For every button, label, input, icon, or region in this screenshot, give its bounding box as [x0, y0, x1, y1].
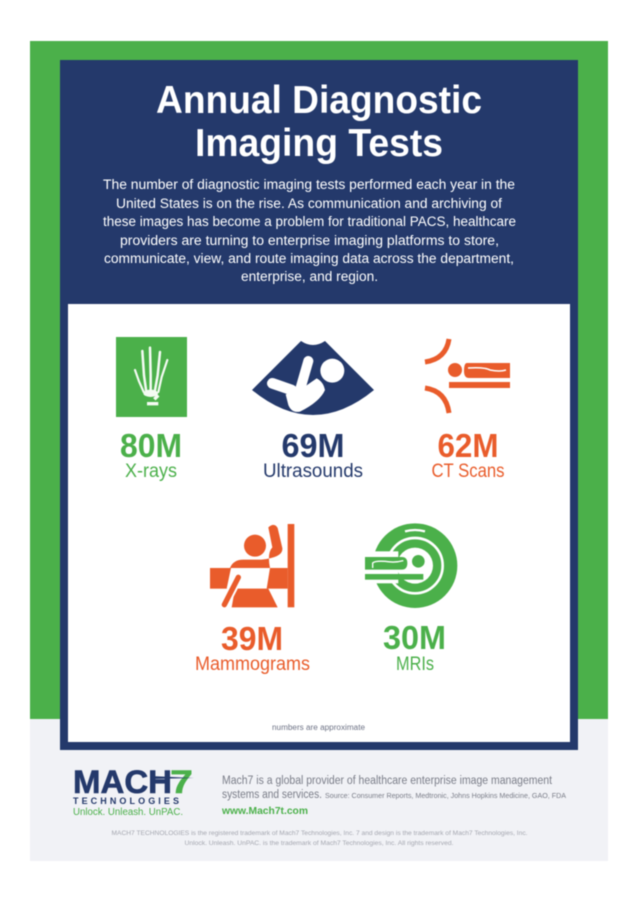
stat: x-rays	[120, 427, 182, 482]
icon: ultrasound	[252, 341, 374, 415]
background: green band	[30, 41, 608, 719]
company description: Source: Consumer Reports, Medtronic, Johns Hopkins Medicine, GAO, FDA	[325, 791, 566, 800]
stat: x-rays: X-rays	[125, 461, 177, 482]
navy frame	[60, 60, 578, 750]
stat: mammograms	[195, 620, 310, 675]
note: numbers are approximate: numbers are approximate	[272, 723, 366, 732]
stat: CT scans: CT Scans	[432, 461, 504, 482]
intro paragraph: providers are turning to enterprise imaging platforms to store,	[120, 233, 499, 248]
stat: mammograms: 39M	[221, 620, 283, 657]
icon: mammogram	[210, 524, 294, 607]
title	[156, 79, 482, 165]
company description	[222, 775, 566, 801]
icon: MRI	[360, 523, 457, 608]
intro paragraph: The number of diagnostic imaging tests performed each year in the	[103, 177, 515, 192]
intro paragraph: these images has become a problem for traditional PACS, healthcare	[103, 214, 516, 229]
icon: x-ray hand	[116, 337, 187, 417]
background: footer gray band	[30, 719, 608, 861]
title: Imaging Tests	[195, 122, 443, 165]
logo: Mach7 Technologies	[73, 764, 194, 818]
legal text	[112, 830, 528, 847]
stat: ultrasounds: Ultrasounds	[263, 461, 363, 482]
intro paragraph: communicate, view, and route imaging data across the department,	[104, 251, 514, 266]
legal text: MACH7 TECHNOLOGIES is the registered trademark of Mach7 Technologies, Inc. 7 and design is the trademark of Mach7 Technologies, Inc.	[112, 830, 528, 837]
company description: systems and services.	[222, 789, 322, 801]
white panel	[68, 304, 570, 742]
legal text: Unlock. Unleash. UnPAC. is the trademark of Mach7 Technologies, Inc. All rights reserved.	[184, 840, 454, 847]
logo: Mach7 Technologies: Unlock. Unleash. UnPAC.	[73, 807, 183, 818]
intro paragraph: United States is on the rise. As communication and archiving of	[116, 196, 502, 211]
logo: Mach7 Technologies: 7	[170, 764, 193, 800]
stat: MRIs: 30M	[383, 619, 446, 656]
website link: www.Mach7t.com	[221, 805, 308, 817]
logo: Mach7 Technologies: MACH	[73, 764, 172, 800]
logo: Mach7 Technologies: TECHNOLOGIES	[73, 796, 179, 806]
stat: MRIs	[383, 619, 446, 675]
stat: CT scans: 62M	[438, 427, 498, 464]
stat: x-rays: 80M	[120, 427, 182, 464]
stat: ultrasounds	[263, 427, 363, 482]
intro paragraph: enterprise, and region.	[241, 269, 378, 284]
stat: CT scans	[432, 427, 504, 482]
company description: Mach7 is a global provider of healthcare enterprise image management	[222, 775, 553, 787]
stat: MRIs: MRIs	[396, 654, 434, 675]
intro paragraph	[103, 177, 516, 284]
icon: CT scan	[425, 339, 510, 413]
stat: ultrasounds: 69M	[282, 427, 344, 464]
stat: mammograms: Mammograms	[195, 654, 310, 675]
title: Annual Diagnostic	[156, 79, 482, 122]
